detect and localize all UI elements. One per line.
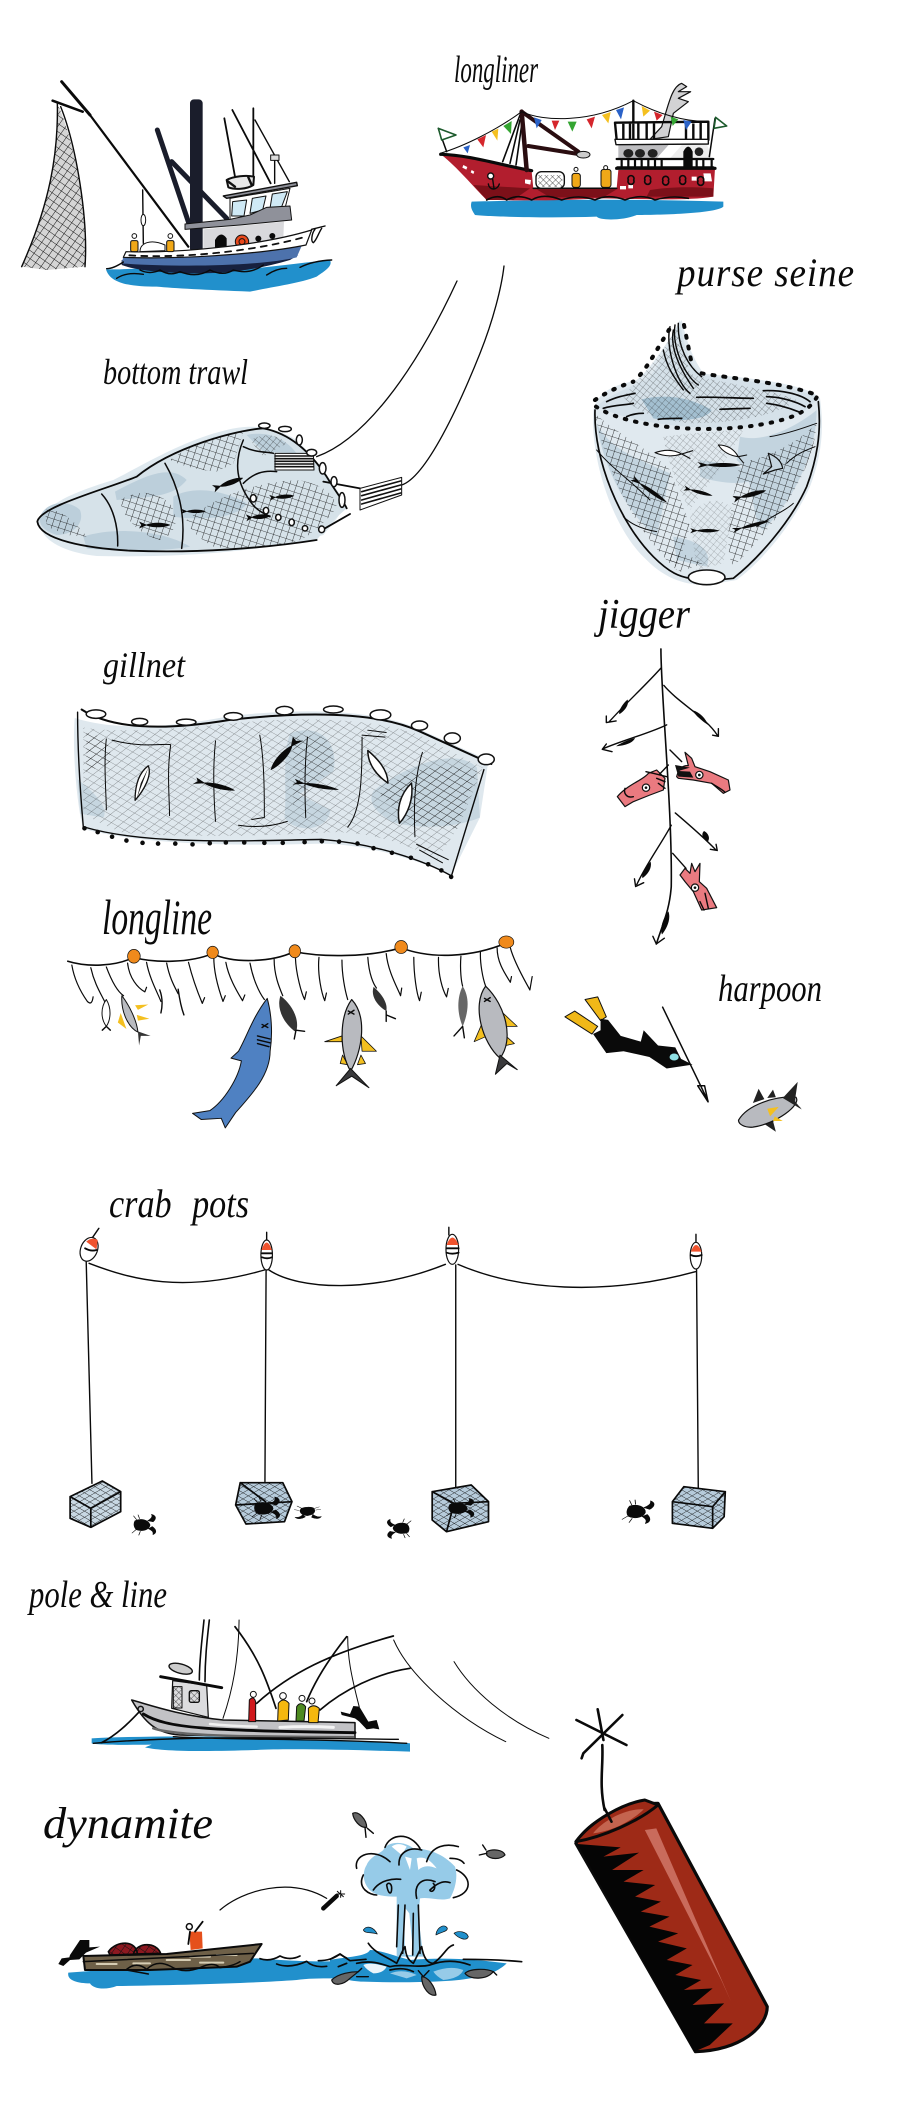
main line [68, 943, 506, 965]
squid lower [673, 853, 717, 910]
bunting [438, 101, 727, 157]
squid left [617, 765, 668, 807]
panel: crab pots [70, 1227, 725, 1538]
flying fish [332, 1813, 505, 1995]
label: bottom trawl: bottom trawl [103, 352, 248, 392]
label: purse seine: purse seine [674, 250, 855, 295]
wood boat [83, 1944, 262, 1974]
panel: bottom trawler boat [22, 82, 332, 292]
end cap [576, 1800, 658, 1842]
outboard motor [341, 1706, 379, 1729]
fish caught in net [135, 737, 412, 823]
mesh [595, 413, 817, 572]
small tuna [118, 996, 151, 1046]
deck gear [536, 166, 611, 188]
crab 1 [132, 1514, 156, 1535]
crab 2 [294, 1506, 321, 1519]
net body [37, 428, 347, 551]
shaded patches [40, 434, 297, 551]
fishers [249, 1691, 319, 1723]
crab 3 [387, 1519, 411, 1538]
squid right [670, 750, 730, 793]
bowl outline [595, 402, 819, 585]
lures and branch lines [602, 668, 718, 944]
water spout [364, 1843, 456, 1957]
deck crew and catch [131, 234, 174, 252]
hanging net [22, 103, 86, 270]
panel: gillnet [74, 706, 494, 879]
panel: purse seine net [593, 320, 822, 585]
label: longliner: longliner [454, 49, 538, 91]
bead rim [595, 325, 817, 429]
lead weights [82, 826, 453, 879]
boom and rigging [53, 82, 188, 247]
panel: longliner boat [438, 83, 727, 219]
tuna [325, 1000, 376, 1088]
label: gillnet: gillnet [103, 645, 186, 685]
purse opening [597, 320, 817, 428]
red hull [441, 154, 715, 200]
thrown arc [220, 1887, 327, 1910]
hull [107, 226, 332, 278]
main line [656, 649, 671, 944]
floats [86, 706, 494, 765]
black jagged shadow [578, 1844, 733, 2052]
water [68, 1958, 370, 1989]
water [106, 260, 331, 292]
small hooked fish [102, 986, 468, 1039]
harpoon [663, 1007, 708, 1102]
droplets [363, 1926, 468, 1939]
label: dynamite: dynamite [43, 1799, 213, 1848]
fuse spark [576, 1709, 626, 1758]
pot 4 [672, 1487, 725, 1528]
superstructure [615, 83, 713, 167]
braces [157, 130, 227, 227]
mast [190, 99, 203, 253]
antennae [224, 108, 289, 189]
large tuna [474, 986, 517, 1074]
blue shark [193, 998, 272, 1128]
net wash [593, 320, 822, 585]
mesh [83, 719, 483, 860]
panel: pole and line boat [92, 1620, 410, 1752]
baited hooks [72, 948, 532, 1005]
fish [139, 474, 295, 528]
masts and rods [199, 1620, 209, 1682]
label: pole and line: pole & line [27, 1574, 167, 1616]
lead line [84, 827, 451, 876]
end cap glint [593, 1809, 644, 1833]
label: jigger: jigger [593, 592, 691, 638]
spout outlines [356, 1836, 468, 1955]
target tuna [739, 1082, 802, 1132]
label: crab pots: crab pots [109, 1181, 249, 1226]
thrower [186, 1922, 203, 1950]
body highlight [645, 1828, 731, 2002]
fuse stem [605, 1808, 611, 1822]
panel: explosion geyser [330, 1813, 522, 1995]
net frame [78, 710, 491, 877]
panel: bottom trawl net [37, 266, 504, 556]
water [471, 200, 723, 219]
splash water [330, 1950, 507, 1982]
bowl shading [597, 410, 817, 567]
panel: dynamite fishing boat [58, 1887, 370, 1989]
diver body [593, 1019, 693, 1069]
fuse [602, 1745, 605, 1810]
cabin [161, 1661, 222, 1717]
fish in the net [630, 445, 783, 533]
fishing lines [223, 1620, 549, 1742]
net wash [41, 427, 345, 556]
label: harpoon: harpoon [718, 968, 822, 1010]
net outline and ribs [37, 428, 360, 551]
trawl doors [275, 453, 402, 510]
pot 3 [432, 1485, 489, 1532]
pot 1 [70, 1481, 121, 1527]
hull [93, 1700, 407, 1743]
wheelhouse [185, 182, 297, 253]
panel: harpoon diver [565, 997, 802, 1132]
wave lines [260, 1954, 365, 1967]
towing wires [317, 266, 504, 485]
fins [565, 997, 606, 1034]
pot 2 [236, 1483, 292, 1524]
squid on jigger [617, 750, 730, 910]
fishing poles [235, 1627, 410, 1710]
net wash [74, 711, 489, 875]
connecting ropes [86, 1262, 698, 1488]
engine [58, 1940, 100, 1966]
panel: jigger [602, 649, 718, 944]
dynamite stick [576, 1709, 767, 2052]
wave lines [330, 1943, 522, 1972]
crab 4 [621, 1499, 655, 1524]
floats [250, 423, 345, 533]
water [92, 1736, 410, 1752]
mask [670, 1054, 679, 1060]
net mesh [45, 432, 337, 548]
red body [576, 1803, 767, 2052]
mast and boom [503, 112, 590, 170]
nets pile [108, 1943, 161, 1955]
thrown stick of dynamite [323, 1891, 345, 1908]
panel: longline [68, 936, 532, 1128]
label: longline: longline [102, 889, 212, 945]
orange floats [128, 936, 514, 963]
buoys [78, 1227, 702, 1270]
shaded patches [78, 730, 480, 828]
